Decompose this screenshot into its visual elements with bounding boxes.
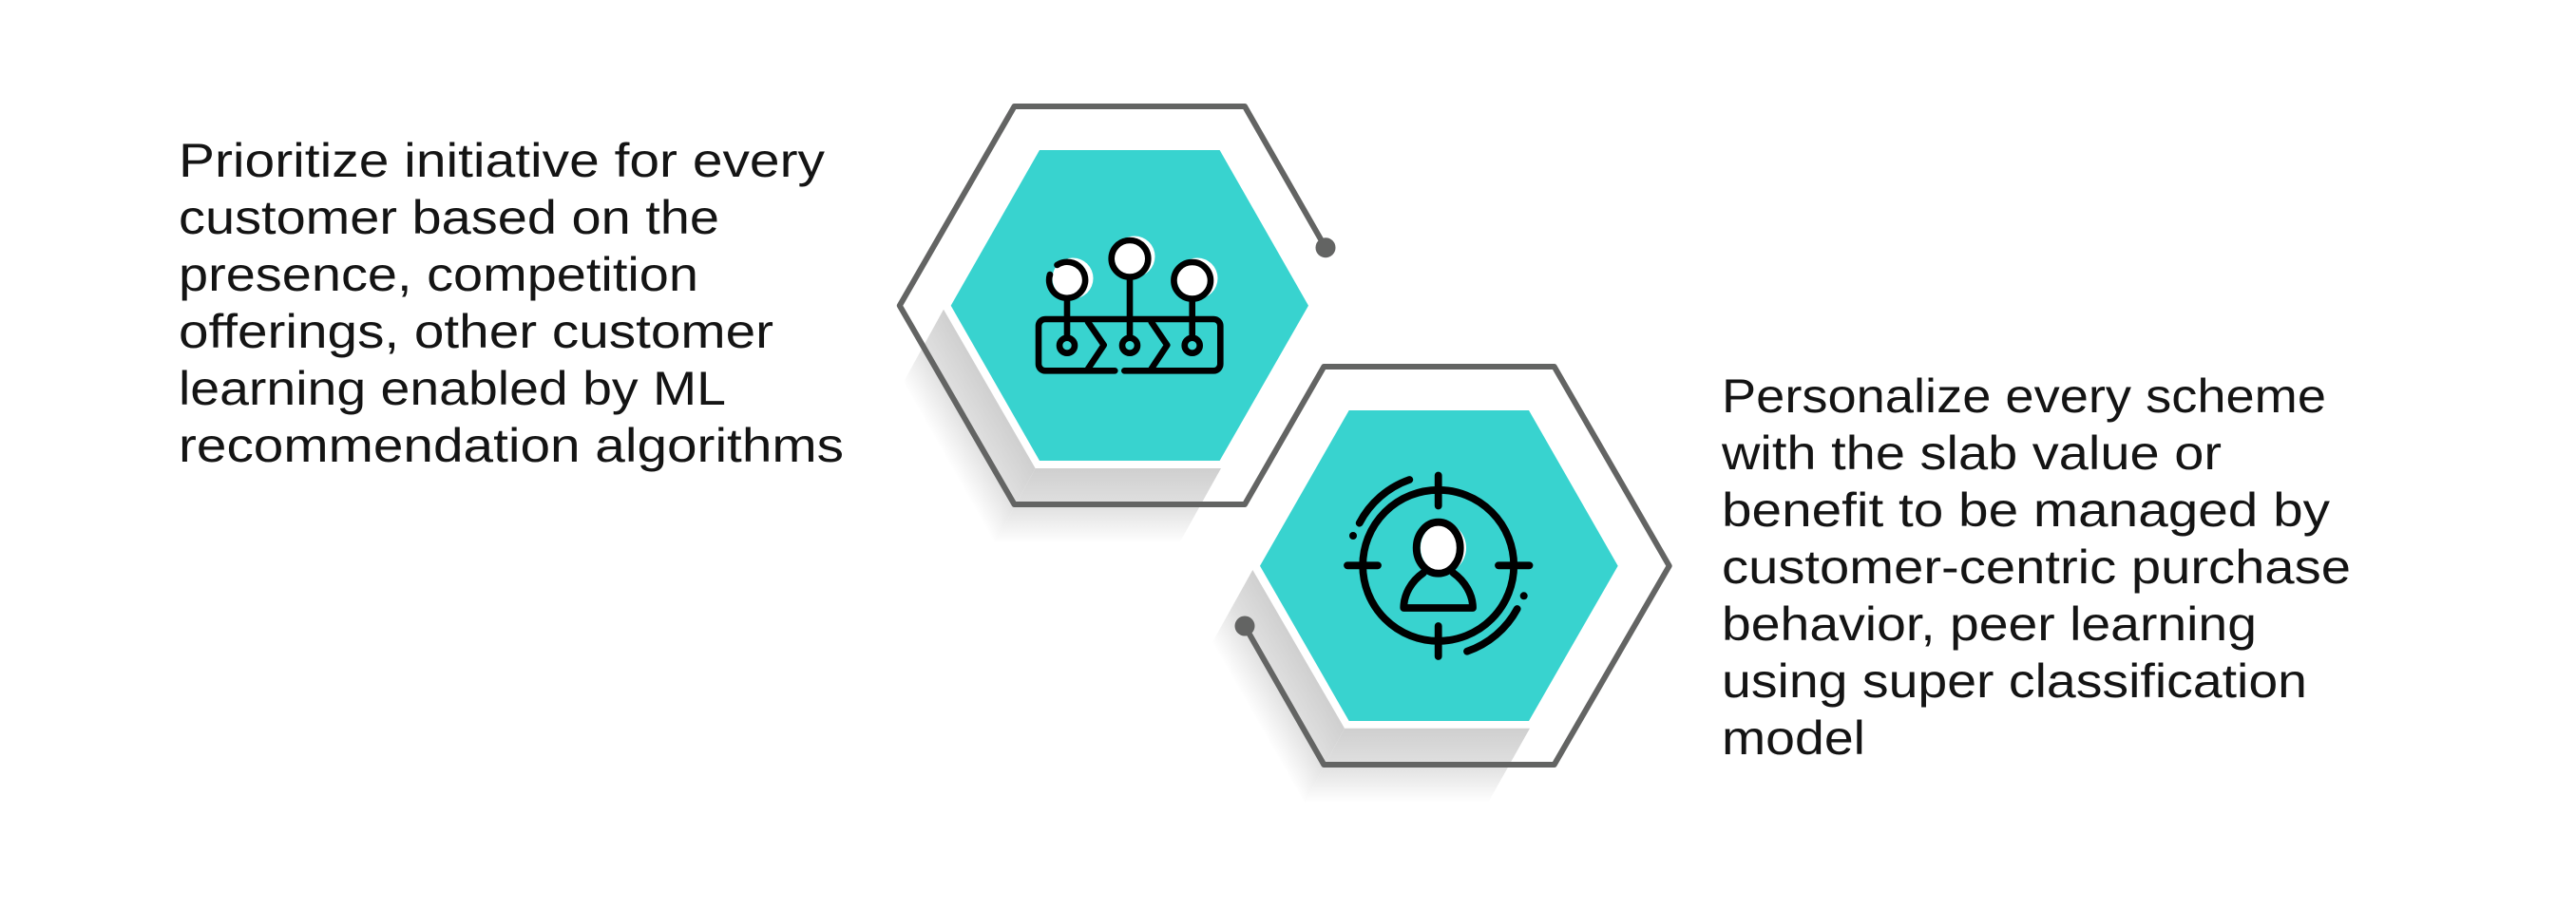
- teal hexagon 1: [951, 150, 1308, 461]
- text block: prioritize initiative: recommendation algorithms: [179, 419, 844, 472]
- icon: process nodes: [1039, 236, 1220, 370]
- text block: prioritize initiative: [179, 134, 844, 472]
- icon: targeted customer: [1347, 475, 1530, 656]
- text block: prioritize initiative: customer based on the: [179, 191, 719, 244]
- text block: prioritize initiative: Prioritize initiative for every: [179, 134, 825, 187]
- text block: personalize scheme: [1721, 370, 2351, 765]
- text block: prioritize initiative: presence, competition: [179, 248, 698, 301]
- text block: prioritize initiative: offerings, other customer: [179, 305, 773, 358]
- text block: personalize scheme: benefit to be managed by: [1722, 483, 2330, 537]
- text block: personalize scheme: with the slab value or: [1721, 427, 2222, 480]
- text block: prioritize initiative: learning enabled by ML: [179, 362, 726, 415]
- text block: personalize scheme: Personalize every scheme: [1722, 370, 2326, 423]
- text block: personalize scheme: model: [1722, 711, 1865, 765]
- connected hexagon outline with end dots: [900, 106, 1670, 765]
- text block: personalize scheme: customer-centric purchase: [1722, 540, 2351, 594]
- hexagon 2 drop shadow: [1212, 570, 1530, 803]
- text block: personalize scheme: behavior, peer learning: [1722, 597, 2257, 651]
- hexagon 1 drop shadow: [904, 310, 1221, 543]
- teal hexagon 2: [1260, 410, 1618, 721]
- text block: personalize scheme: using super classification: [1722, 654, 2307, 708]
